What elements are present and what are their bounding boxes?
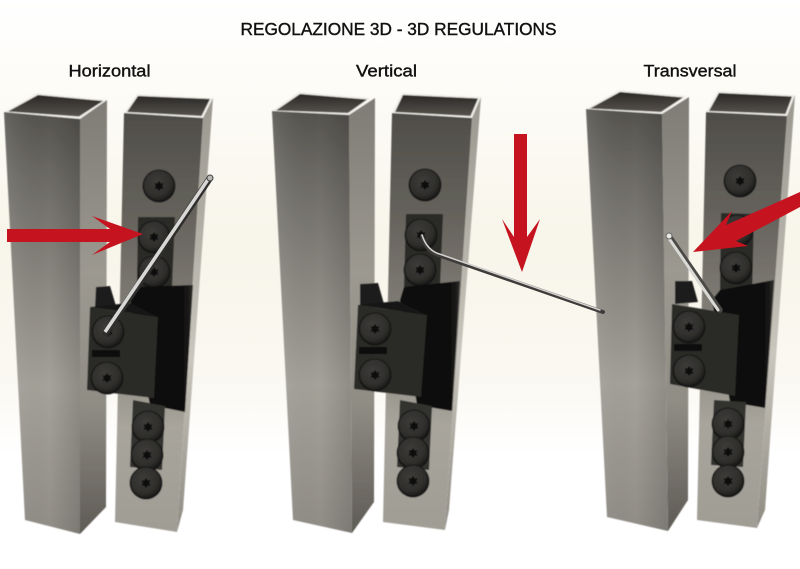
upper mounting plate and screws	[720, 213, 754, 297]
lower mounting plate and screws	[396, 400, 432, 498]
panel: horizontal regulation	[4, 93, 213, 534]
hinge pocket	[400, 281, 460, 411]
hinge assembly photo	[586, 90, 795, 531]
heading: Transversal: Transversal	[644, 62, 736, 80]
panel: transversal regulation	[586, 90, 800, 531]
right tube	[383, 93, 481, 530]
hex key	[666, 233, 720, 310]
red arrow: horizontal	[7, 216, 143, 255]
left tube	[272, 92, 375, 533]
left tube	[586, 90, 689, 531]
right tube	[115, 94, 213, 532]
upper mounting plate and screws	[137, 217, 175, 288]
hinge pocket	[712, 280, 774, 408]
hinge pocket	[130, 285, 193, 412]
hinge assembly photo	[4, 93, 213, 534]
hinge assembly photo	[272, 92, 481, 533]
hex key	[422, 235, 603, 312]
lower mounting plate and screws	[130, 400, 165, 500]
upper mounting plate and screws	[404, 214, 443, 287]
top screw	[408, 168, 442, 202]
hinge block and screws	[670, 281, 739, 396]
red arrow: transversal	[693, 192, 800, 252]
right tube	[697, 91, 795, 528]
hex key	[105, 175, 213, 333]
panel: vertical regulation	[272, 92, 603, 533]
heading: Horizontal: Horizontal	[68, 62, 150, 80]
red arrow: vertical	[502, 134, 540, 272]
hinge block and screws	[354, 283, 427, 397]
left tube	[4, 93, 107, 534]
hinge block and screws	[87, 286, 158, 398]
lower mounting plate and screws	[711, 400, 746, 498]
top screw	[724, 164, 756, 198]
title: REGOLAZIONE 3D - 3D REGULATIONS	[240, 19, 556, 39]
heading: Vertical: Vertical	[356, 62, 417, 80]
top screw	[142, 170, 176, 202]
